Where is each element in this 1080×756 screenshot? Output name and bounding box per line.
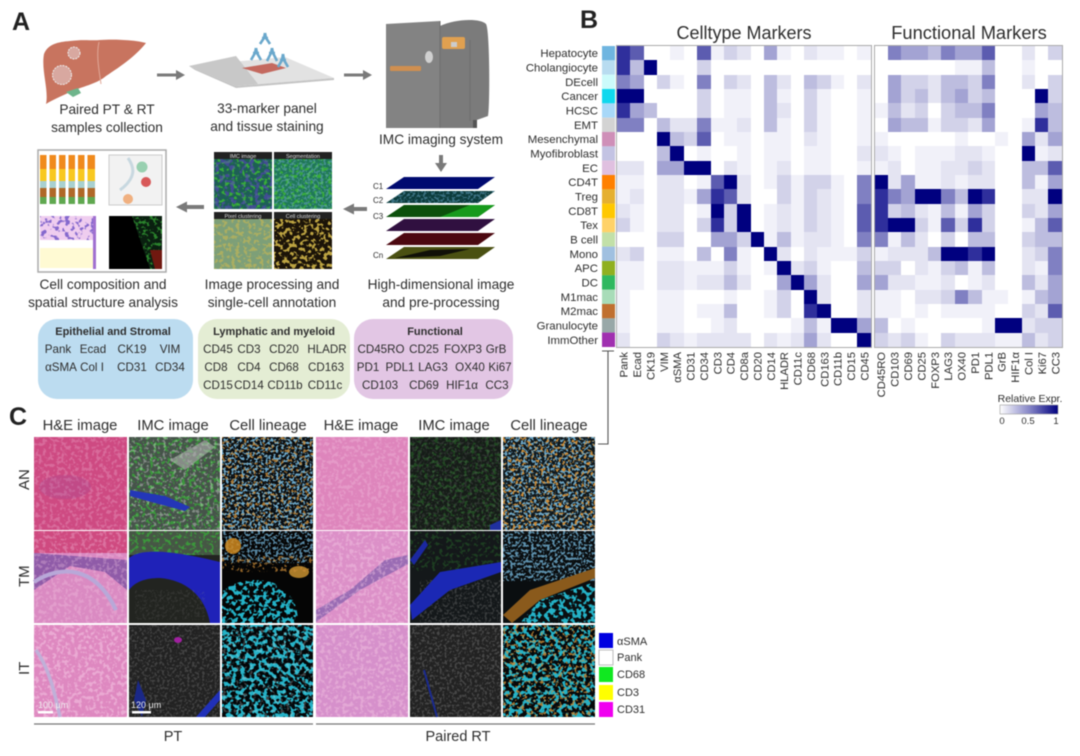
label: high-dimensional: High-dimensional image	[368, 277, 514, 292]
legend: IMC channels	[599, 633, 648, 717]
column labels: functional markers	[876, 351, 1062, 397]
marker box: functional: OX40	[455, 361, 485, 374]
RT IT H&E	[316, 625, 408, 717]
label: image processing	[205, 277, 339, 310]
column labels: celltype markers: CD4	[726, 352, 738, 374]
legend: IMC channels: αSMA	[617, 636, 648, 648]
scale bar: 100 um: 100 μm	[38, 700, 68, 710]
marker box: functional: CD69	[409, 379, 439, 392]
column labels: celltype markers: CD68	[806, 352, 818, 381]
image grid	[34, 437, 595, 717]
marker box: functional	[354, 319, 513, 399]
column labels: functional markers: CD25	[916, 352, 928, 381]
fluorescence image	[109, 216, 162, 269]
heatmap row labels: CD8T	[568, 206, 598, 218]
legend: IMC channels: Pank	[617, 652, 643, 664]
panel letter A: A	[12, 8, 30, 36]
label: marker panel: 33-marker panel	[217, 101, 317, 116]
column labels: functional markers: Col I	[1024, 352, 1036, 375]
legend: relative expression: 1	[1053, 416, 1059, 427]
arrow	[344, 70, 372, 80]
RT TM H&E	[316, 531, 408, 623]
column headers: IMC image	[418, 418, 490, 434]
analysis box	[38, 150, 166, 272]
PT IT H&E	[34, 625, 127, 717]
RT AN IMC	[410, 437, 501, 530]
heatmap row labels: Mono	[570, 249, 598, 261]
heatmap row labels: EMT	[574, 120, 598, 132]
RT AN H&E	[316, 437, 408, 530]
marker box: lymphatic and myeloid: Lymphatic and myeloid	[213, 326, 335, 338]
RT IT lineage	[503, 625, 595, 717]
marker box: functional: LAG3	[418, 361, 448, 374]
RT TM lineage	[503, 531, 595, 623]
marker box: epithelial and stromal: Pank	[45, 343, 71, 356]
column headers: Cell lineage	[510, 418, 588, 434]
column labels: celltype markers: CD15	[846, 352, 858, 381]
marker box: functional: PDL1	[385, 361, 415, 374]
label: composition: spatial structure analysis	[28, 295, 178, 310]
column labels: celltype markers: Ecad	[632, 352, 644, 378]
marker box: lymphatic and myeloid: CD163	[308, 361, 344, 374]
marker box: lymphatic and myeloid: HLADR	[307, 343, 347, 356]
marker box: lymphatic and myeloid: CD4	[237, 361, 261, 374]
marker box: functional: FOXP3	[444, 343, 482, 356]
marker box: epithelial and stromal: Ecad	[80, 343, 106, 356]
column labels: functional markers: CD103	[890, 352, 902, 387]
column labels: functional markers: PDL1	[983, 352, 995, 380]
label: sample collection	[51, 102, 163, 135]
spatial map	[40, 216, 96, 269]
label: marker panel: and tissue staining	[210, 119, 324, 134]
PT IT IMC	[129, 625, 220, 717]
marker box: lymphatic and myeloid: CD45	[203, 343, 233, 356]
label: high-dimensional	[368, 277, 514, 310]
PT AN H&E	[34, 437, 127, 530]
column labels: celltype markers	[619, 351, 871, 390]
marker box: lymphatic and myeloid: CD20	[269, 343, 299, 356]
group bracket: paired RT: Paired RT	[425, 729, 491, 745]
marker box: functional: GrB	[486, 343, 507, 356]
column labels: celltype markers: CD3	[712, 352, 724, 374]
column labels: functional markers: HIF1α	[1010, 351, 1022, 383]
heatmap row labels	[526, 48, 599, 347]
column headers	[43, 418, 588, 434]
heatmap row labels: Hepatocyte	[540, 48, 598, 60]
column labels: celltype markers: Pank	[619, 352, 631, 378]
heading: functional markers: Functional Markers	[891, 22, 1047, 43]
PT IT lineage	[222, 625, 313, 717]
marker box: lymphatic and myeloid: CD68	[269, 361, 299, 374]
marker box: functional: PD1	[357, 361, 379, 374]
label: IMC imaging system: IMC imaging system	[379, 132, 503, 147]
marker box: lymphatic and myeloid: CD8	[204, 361, 228, 374]
RT TM IMC	[410, 531, 501, 623]
marker box: functional: CD25	[409, 343, 439, 356]
heatmap: celltype markers	[616, 44, 872, 348]
label: high-dimensional: and pre-processing	[382, 295, 500, 310]
legend: relative expression: 0.5	[1021, 416, 1035, 427]
label: sample collection: samples collection	[51, 120, 163, 135]
image processing quad: Pixel clustering	[224, 214, 262, 220]
column labels: celltype markers: CD163	[819, 352, 831, 387]
heatmap row labels: Cholangiocyte	[526, 62, 598, 74]
marker box: functional: Functional	[407, 326, 463, 338]
panel A: workflow	[28, 20, 514, 310]
connector from heatmap to panel C	[598, 351, 614, 444]
marker box: lymphatic and myeloid: CD15	[203, 379, 233, 392]
stacked bars	[40, 155, 95, 204]
column labels: celltype markers: CK19	[645, 352, 657, 380]
column labels: celltype markers: CD31	[686, 352, 698, 381]
heading: celltype markers: Celltype Markers	[676, 23, 812, 43]
marker box: epithelial and stromal: αSMA	[45, 361, 77, 374]
row labels: TM	[16, 565, 33, 587]
icon: IMC machine	[386, 20, 489, 128]
image processing quad: IMC image	[230, 154, 256, 160]
cell type colour strip	[602, 46, 615, 347]
stack labels: C3	[373, 212, 384, 221]
row labels	[16, 469, 33, 675]
PT AN IMC	[129, 437, 220, 530]
column labels: celltype markers: CD11b	[833, 352, 845, 386]
legend: IMC channels: CD68	[617, 669, 645, 681]
heatmap row labels: Granulocyte	[537, 320, 598, 332]
arrow left	[176, 202, 204, 212]
label: composition: Cell composition and	[39, 277, 167, 292]
marker box: functional: HIF1α	[446, 379, 478, 392]
PT TM lineage	[222, 531, 313, 623]
heatmap row labels: HCSC	[566, 106, 598, 118]
scale bar: 120 um: 120 μm	[131, 700, 161, 710]
heatmap row labels: M2mac	[561, 306, 598, 318]
stack labels: C2	[373, 196, 384, 205]
legend: relative expression	[998, 393, 1062, 427]
PT TM H&E	[34, 531, 127, 623]
heatmap row labels: Treg	[575, 192, 598, 204]
column headers: H&E image	[43, 418, 117, 434]
PT TM IMC	[129, 531, 220, 623]
RT IT IMC	[410, 625, 501, 717]
image stack	[386, 177, 495, 259]
arrow down	[435, 155, 447, 172]
legend: relative expression: 0	[999, 416, 1005, 427]
stack labels: C1	[373, 182, 384, 191]
column labels: functional markers: OX40	[956, 352, 968, 381]
column labels: functional markers: LAG3	[943, 352, 955, 381]
marker box: lymphatic and myeloid	[198, 319, 350, 399]
column labels: functional markers: CC3	[1050, 352, 1062, 374]
arrow left	[343, 204, 367, 214]
marker box: epithelial and stromal: CK19	[117, 343, 147, 356]
heatmap row labels: Mesenchymal	[528, 134, 598, 146]
cell sketch	[109, 155, 162, 205]
PT AN lineage	[222, 437, 313, 530]
column labels: celltype markers: CD45	[859, 352, 871, 381]
heatmap row labels: Cancer	[561, 91, 598, 103]
marker box: functional: Ki67	[488, 361, 512, 374]
marker box: epithelial and stromal: VIM	[160, 343, 180, 356]
heatmap row labels: DC	[582, 278, 598, 290]
heatmap row labels: Tex	[580, 220, 598, 232]
marker box: epithelial and stromal: CD31	[117, 361, 147, 374]
column labels: celltype markers: CD14	[766, 352, 778, 381]
arrow	[157, 70, 185, 80]
RT AN lineage	[503, 437, 595, 530]
heatmap row labels: APC	[575, 263, 598, 275]
icon: tissue slide with antibodies	[189, 33, 334, 88]
heatmap row labels: ImmOther	[547, 335, 598, 347]
heatmap row labels: B cell	[570, 234, 598, 246]
label: sample collection: Paired PT & RT	[59, 102, 155, 117]
column headers: IMC image	[137, 418, 209, 434]
icon: liver	[43, 40, 146, 104]
panel letter B: B	[580, 6, 598, 34]
column labels: celltype markers: VIM	[659, 352, 671, 372]
row labels: AN	[16, 469, 33, 490]
marker box: lymphatic and myeloid: CD11c	[308, 379, 342, 392]
legend: IMC channels: CD3	[617, 687, 639, 699]
stack labels	[373, 182, 384, 260]
heatmap: functional markers	[874, 44, 1064, 348]
legend: relative expression: Relative Expr.	[998, 393, 1062, 405]
label: composition	[28, 277, 178, 310]
heatmap row labels: CD4T	[568, 177, 598, 189]
label: image processing: single-cell annotation	[208, 295, 336, 310]
marker box: functional: CD103	[362, 379, 398, 392]
column labels: celltype markers: CD34	[699, 352, 711, 381]
marker box: functional: CC3	[485, 379, 509, 392]
column labels: celltype markers: CD11c	[792, 352, 804, 385]
column labels: functional markers: Ki67	[1037, 352, 1049, 374]
stack labels: Cn	[373, 251, 383, 260]
column headers: H&E image	[324, 418, 398, 434]
heatmap row labels: EC	[582, 163, 598, 175]
group bracket: PT: PT	[164, 729, 182, 745]
panel: marker groups	[38, 319, 513, 399]
column labels: functional markers: FOXP3	[930, 352, 942, 389]
panel letter C: C	[9, 403, 27, 431]
marker box: epithelial and stromal	[38, 319, 193, 399]
column labels: functional markers: GrB	[997, 352, 1009, 372]
image processing quad	[214, 152, 332, 269]
image processing quad: Segmentation	[286, 154, 320, 160]
legend: IMC channels: CD31	[617, 704, 645, 716]
heatmap row labels: Myofibroblast	[530, 148, 599, 160]
marker box: functional: CD45RO	[357, 343, 405, 356]
marker box: lymphatic and myeloid: CD11b	[267, 379, 303, 392]
marker box: lymphatic and myeloid: CD14	[234, 379, 264, 392]
label: image processing: Image processing and	[205, 277, 339, 292]
label: marker panel	[210, 101, 324, 134]
column labels: functional markers: CD45RO	[876, 352, 888, 397]
marker box: lymphatic and myeloid: CD3	[237, 343, 261, 356]
marker box: epithelial and stromal: Epithelial and Stromal	[55, 326, 171, 338]
column labels: celltype markers: CD20	[752, 352, 764, 381]
marker box: epithelial and stromal: Col I	[80, 361, 104, 374]
column labels: celltype markers: CD8a	[739, 351, 751, 381]
image processing quad: Cell clustering	[286, 214, 320, 220]
marker box: epithelial and stromal: CD34	[155, 361, 185, 374]
heatmap row labels: DEcell	[565, 77, 598, 89]
column headers: Cell lineage	[229, 418, 307, 434]
column labels: celltype markers: HLADR	[779, 352, 791, 390]
column labels: functional markers: CD69	[903, 352, 915, 381]
heatmap row labels: M1mac	[561, 292, 598, 304]
row labels: IT	[16, 662, 33, 675]
column labels: functional markers: PD1	[970, 352, 982, 374]
column labels: celltype markers: αSMA	[672, 351, 684, 383]
